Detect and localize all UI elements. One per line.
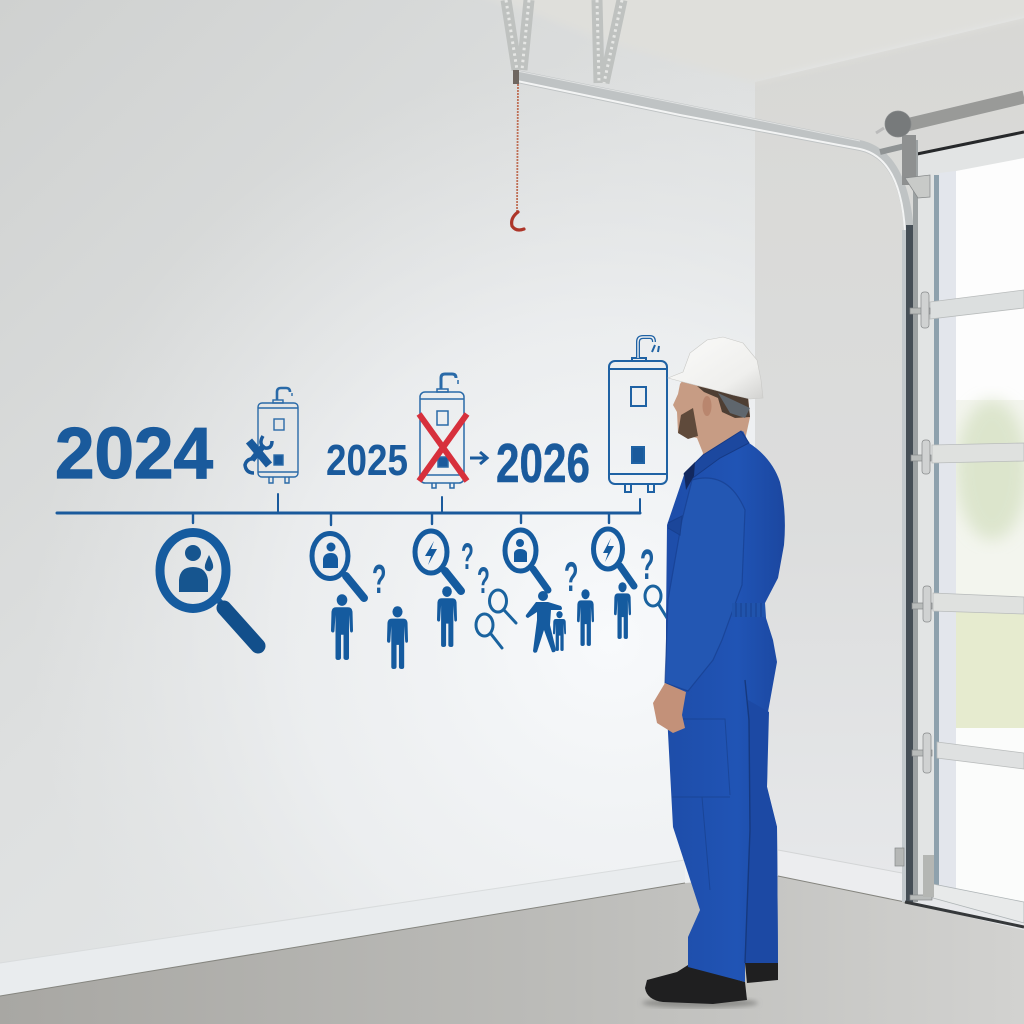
icon: magnifier with person 1 [312,534,364,598]
hand [653,683,686,733]
icon: water heater with wrench [245,388,298,483]
icon: magnifier with lightning 1 [415,531,461,591]
concrete floor [0,876,1024,1024]
question marks: ? [640,542,654,589]
bottom rail [933,884,1024,923]
hard hat strap [718,393,750,418]
ceiling [470,0,1024,82]
question marks: ? [372,557,386,603]
ear [702,396,712,416]
left wall [0,0,780,1024]
icon: large magnifier with person and drop [160,532,258,646]
year 2025: 2025 [326,436,408,485]
glazing bars [930,290,1024,319]
question marks: ? [477,561,490,602]
coverall body [666,431,785,982]
icon: magnifier with person 2 [505,530,548,590]
icon: crossed-out water heater [419,374,467,488]
icon: magnifier with lightning 2 [594,529,634,586]
collar [684,431,749,480]
question marks: ? [461,537,474,578]
year 2024: 2024 [55,414,213,494]
ceiling struts [506,0,622,83]
icon: small magnifiers [476,586,667,648]
garage door [876,97,1024,927]
icon: new water heater [609,337,667,492]
top black seal [917,132,1024,154]
timeline axis with ticks [57,494,640,525]
question marks: ? [564,554,578,601]
vertical rails [902,230,906,902]
question marks [372,537,654,603]
skirting board [0,850,902,996]
waist band [732,603,765,617]
window panes [956,150,1024,910]
chain and red hook [512,84,524,230]
neck and head [673,380,750,470]
arrow 2025 to 2026 [470,452,487,464]
overhead door track [513,70,914,232]
icon: person pointing [526,591,562,653]
year 2026: 2026 [496,432,590,494]
boots [642,963,778,1008]
white hard hat [668,337,763,399]
icon: standing people [331,582,631,669]
worker in blue coverall [642,337,785,1008]
hair [697,386,750,418]
door frame [918,134,1024,923]
rear leg and seams [672,680,778,963]
beard [678,408,698,439]
timeline infographic [55,337,667,669]
hinges and brackets [876,111,934,900]
right wall [755,18,1024,1024]
chest pocket [668,516,682,535]
arm sleeve [665,478,745,691]
spring tube [898,97,1024,127]
